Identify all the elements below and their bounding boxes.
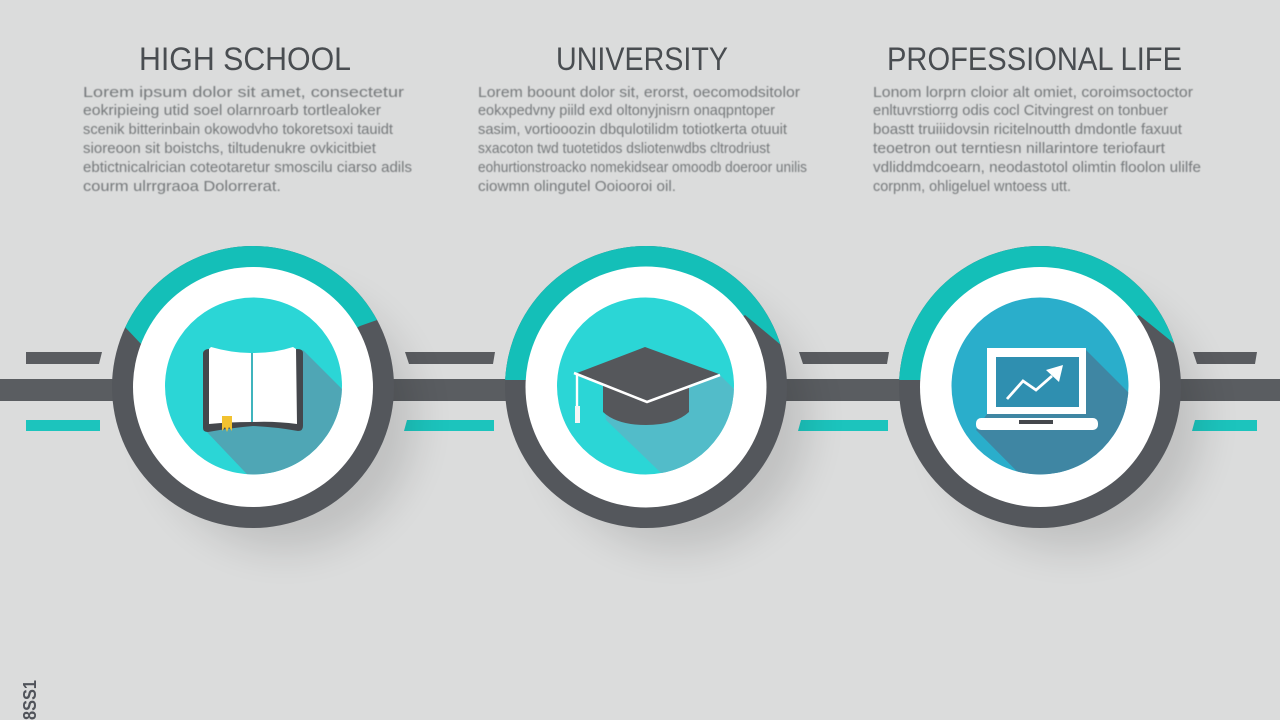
dark ring bbox=[505, 246, 787, 528]
text block: professional life: corpnm, ohligeluel wntoess utt. bbox=[873, 179, 1071, 195]
icon: graduation cap bbox=[574, 347, 720, 425]
rotated side label: 8SS1 bbox=[20, 680, 40, 720]
text block: university: eohurtionstroacko nomekidsear omoodb doeroor unilis bbox=[478, 160, 807, 176]
heading: university: UNIVERSITY bbox=[556, 41, 728, 77]
accent bars: teal lower bbox=[26, 420, 1257, 431]
node: high school bbox=[112, 246, 415, 550]
drop shadow bbox=[942, 290, 1202, 550]
text block: professional life: teoetron out terntiesn nillarintore teriofaurt bbox=[873, 141, 1165, 157]
dark ring bbox=[899, 246, 1181, 528]
inner disc bbox=[165, 298, 342, 474]
icon: laptop with rising chart bbox=[976, 348, 1098, 430]
text block: high school: ebtictnicalrician coteotaretur smoscilu ciarso adils bbox=[83, 160, 412, 176]
text block: high school: eokripieing utid soel olarnroarb tortlealoker bbox=[83, 103, 381, 119]
teal arc bbox=[505, 246, 780, 380]
text block: university: ciowmn olingutel Ooiooroi oil. bbox=[478, 179, 676, 195]
inner disc bbox=[952, 298, 1128, 474]
heading: high school: HIGH SCHOOL bbox=[139, 41, 351, 77]
dark ring bbox=[112, 246, 394, 528]
text block: professional life: vdliddmdcoearn, neodastotol olimtin floolon ulilfe bbox=[873, 160, 1201, 176]
text block: university bbox=[478, 85, 807, 195]
text block: high school: scenik bitterinbain okowodvho tokoretsoxi tauidt bbox=[83, 122, 393, 138]
teal arc bbox=[125, 246, 377, 344]
timeline bar bbox=[0, 379, 1280, 401]
teal arc bbox=[899, 246, 1174, 380]
icon: open book bbox=[203, 347, 303, 432]
long shadow bbox=[976, 350, 1128, 474]
accent bars: dark upper bbox=[26, 352, 1257, 364]
text block: professional life bbox=[873, 85, 1201, 195]
white ring bbox=[920, 267, 1160, 507]
text block: university: eokxpedvny piild exd oltonyjnisrn onaqpntoper bbox=[478, 103, 775, 119]
text block: university: Lorem boount dolor sit, erorst, oecomodsitolor bbox=[478, 85, 800, 101]
text block: professional life: Lonom lorprn cloior alt omiet, coroimsoctoctor bbox=[873, 85, 1193, 101]
text block: high school: sioreoon sit boistchs, tiltudenukre ovkicitbiet bbox=[83, 141, 376, 157]
long shadow bbox=[605, 375, 734, 473]
heading: professional life: PROFESSIONAL LIFE bbox=[887, 41, 1182, 77]
text block: university: sxacoton twd tuotetidos dsliotenwdbs cltrodriust bbox=[478, 141, 770, 157]
text block: professional life: boastt truiiidovsin ricitelnoutth dmdontle faxuut bbox=[873, 122, 1182, 138]
node: professional life bbox=[899, 246, 1202, 550]
node: university bbox=[505, 246, 808, 550]
white ring bbox=[526, 266, 766, 508]
text block: high school: Lorem ipsum dolor sit amet, consectetur bbox=[83, 85, 404, 101]
text block: high school bbox=[83, 85, 412, 195]
inner disc bbox=[557, 298, 734, 474]
text block: professional life: enltuvrstiorrg odis cocl Citvingrest on tonbuer bbox=[873, 103, 1168, 119]
drop shadow bbox=[548, 290, 808, 550]
white ring bbox=[133, 267, 373, 507]
text block: university: sasim, vortiooozin dbqulotilidm totiotkerta otuuit bbox=[478, 122, 787, 138]
long shadow bbox=[206, 350, 342, 474]
text block: high school: courm ulrrgraoa Dolorrerat. bbox=[83, 179, 281, 195]
drop shadow bbox=[155, 290, 415, 550]
